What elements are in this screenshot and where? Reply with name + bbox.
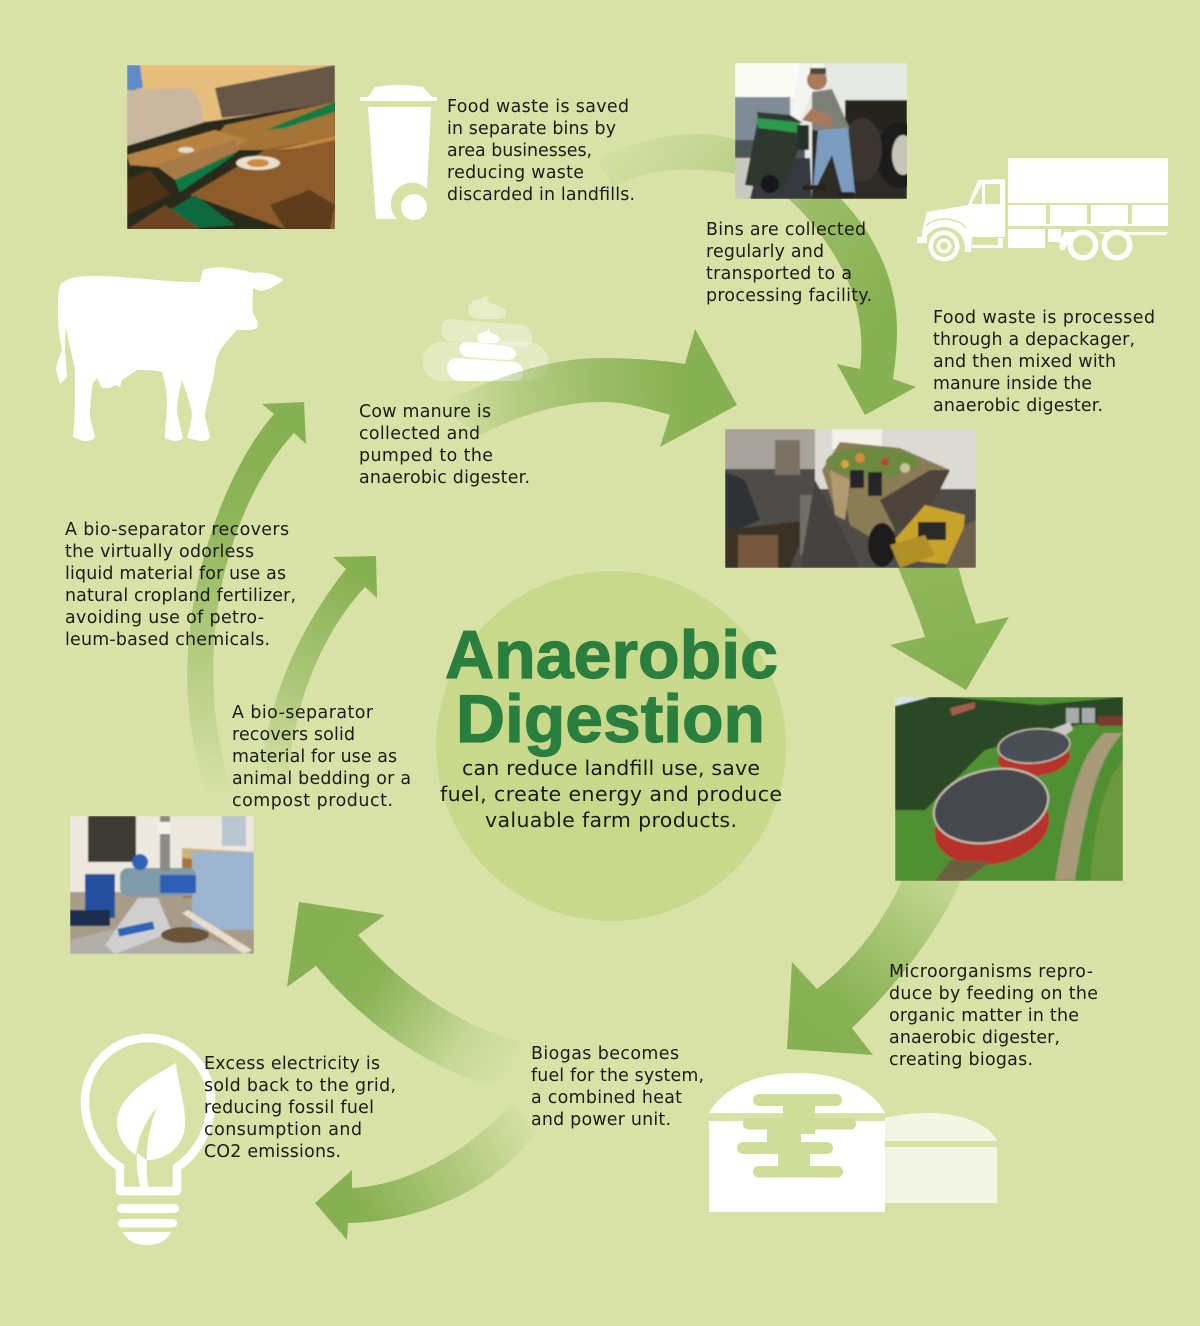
text: microorganisms: creating biogas.	[889, 1050, 1033, 1070]
title	[445, 617, 778, 757]
icon: cow	[56, 267, 283, 441]
arrow: biogas to bio-separator	[287, 902, 527, 1090]
icon: trash bin	[360, 85, 437, 220]
photo: food waste bins	[127, 65, 340, 230]
text: liquid fertilizer: A bio-separator recovers	[65, 520, 289, 540]
text: biogas fuel: and power unit.	[531, 1110, 671, 1130]
text: bins collected	[706, 220, 872, 306]
text: solid bedding: compost product.	[232, 791, 393, 811]
subtitle: fuel, create energy and produce	[440, 782, 782, 806]
title: Anaerobic	[445, 617, 778, 693]
text: microorganisms: Microorganisms repro-	[889, 962, 1093, 982]
text: microorganisms: organic matter in the	[889, 1006, 1079, 1026]
text: solid bedding	[232, 703, 411, 811]
text: microorganisms: anaerobic digester,	[889, 1028, 1060, 1048]
text: liquid fertilizer	[65, 520, 296, 650]
text: microorganisms	[889, 962, 1098, 1070]
text: cow manure: anaerobic digester.	[359, 468, 530, 488]
text: liquid fertilizer: avoiding use of petro-	[65, 608, 264, 628]
icon: large digester	[709, 1073, 885, 1212]
text: depackager: anaerobic digester.	[933, 396, 1103, 416]
text: bins collected: transported to a	[706, 264, 852, 284]
text: food waste saved: area businesses,	[447, 141, 592, 161]
subtitle: can reduce landfill use, save	[462, 756, 760, 780]
text: cow manure	[359, 402, 530, 488]
text: excess electricity: reducing fossil fuel	[204, 1098, 374, 1118]
arrow: digester to biogas	[787, 878, 962, 1055]
arrow: biogas to electricity	[315, 1102, 537, 1240]
text: liquid fertilizer: natural cropland fertilizer,	[65, 586, 296, 606]
text: excess electricity: consumption and	[204, 1120, 362, 1140]
arrow: solid bedding	[262, 556, 377, 785]
text: liquid fertilizer: the virtually odorless	[65, 542, 254, 562]
text: solid bedding: material for use as	[232, 747, 397, 767]
photo: digester tanks	[895, 697, 1123, 881]
icon: small digester	[885, 1113, 997, 1203]
text: bins collected: Bins are collected	[706, 220, 866, 240]
icon: lightbulb with leaf	[85, 1038, 211, 1245]
text: depackager: manure inside the	[933, 374, 1092, 394]
arrow: liquid fertilizer to cow	[187, 402, 306, 800]
text: depackager: and then mixed with	[933, 352, 1116, 372]
text: cow manure: Cow manure is	[359, 402, 491, 422]
text: biogas fuel: Biogas becomes	[531, 1044, 679, 1064]
text: depackager: Food waste is processed	[933, 308, 1155, 328]
text: excess electricity: CO2 emissions.	[204, 1142, 341, 1162]
text: food waste saved: in separate bins by	[447, 119, 616, 139]
text: liquid fertilizer: liquid material for use as	[65, 564, 286, 584]
arrow: bins to digester	[597, 134, 916, 415]
text: biogas fuel: fuel for the system,	[531, 1066, 704, 1086]
text: microorganisms: duce by feeding on the	[889, 984, 1098, 1004]
arrow: processing to digester farm	[890, 560, 1009, 690]
text: solid bedding: animal bedding or a	[232, 769, 411, 789]
text: food waste saved: Food waste is saved	[447, 97, 629, 117]
text: excess electricity: Excess electricity is	[204, 1054, 380, 1074]
text: food waste saved: discarded in landfills.	[447, 185, 635, 205]
text: biogas fuel: a combined heat	[531, 1088, 682, 1108]
text: food waste saved	[447, 97, 635, 205]
text: excess electricity: sold back to the grid,	[204, 1076, 396, 1096]
photo: bio-separator machine	[70, 816, 254, 954]
subtitle	[440, 756, 782, 832]
subtitle: valuable farm products.	[485, 808, 737, 832]
text: bins collected: processing facility.	[706, 286, 872, 306]
text: liquid fertilizer: leum-based chemicals.	[65, 630, 270, 650]
photo: depackager and loader	[725, 429, 976, 568]
text: solid bedding: A bio-separator	[232, 703, 374, 723]
text: excess electricity	[204, 1054, 396, 1162]
photo: worker with bin	[735, 63, 924, 199]
text: cow manure: collected and	[359, 424, 480, 444]
text: bins collected: regularly and	[706, 242, 824, 262]
text: depackager: through a depackager,	[933, 330, 1135, 350]
text: biogas fuel	[531, 1044, 704, 1130]
text: cow manure: pumped to the	[359, 446, 493, 466]
icon: manure pile	[423, 291, 548, 381]
text: food waste saved: reducing waste	[447, 163, 584, 183]
arrow: manure to digester	[436, 329, 737, 447]
icon: truck	[917, 158, 1168, 269]
text: solid bedding: recovers solid	[232, 725, 355, 745]
text: depackager	[933, 308, 1155, 416]
center circle	[436, 571, 786, 921]
title: Digestion	[456, 681, 765, 757]
